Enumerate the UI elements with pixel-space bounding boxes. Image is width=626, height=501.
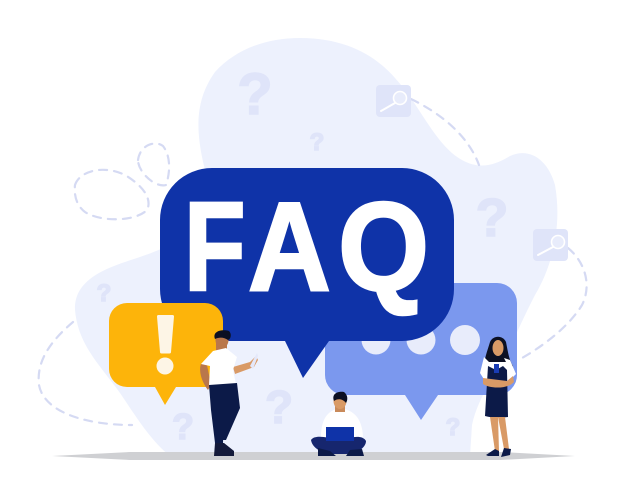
question marks: ? (97, 280, 111, 307)
background blob (75, 38, 557, 456)
question marks: ? (172, 406, 194, 447)
ground shadow (52, 452, 575, 460)
question marks: ? (237, 62, 273, 127)
FAQ heading: A (248, 176, 331, 317)
bubble: exclamation (109, 303, 223, 405)
question marks (97, 62, 508, 447)
icon: search top (376, 85, 411, 117)
bubble: FAQ (160, 168, 454, 378)
FAQ heading: Q (338, 176, 429, 317)
icon: search right (533, 229, 568, 261)
dashed paths (39, 99, 587, 425)
bubble: blue dots (325, 283, 517, 420)
person: sitting man with laptop (311, 392, 366, 456)
FAQ heading (184, 176, 429, 318)
question marks: ? (446, 414, 460, 441)
person: standing woman (480, 337, 516, 457)
question marks: ? (476, 188, 508, 248)
FAQ heading: F (184, 177, 246, 318)
person: standing man (200, 330, 258, 456)
question marks: ? (265, 381, 293, 433)
question marks: ? (310, 129, 324, 156)
